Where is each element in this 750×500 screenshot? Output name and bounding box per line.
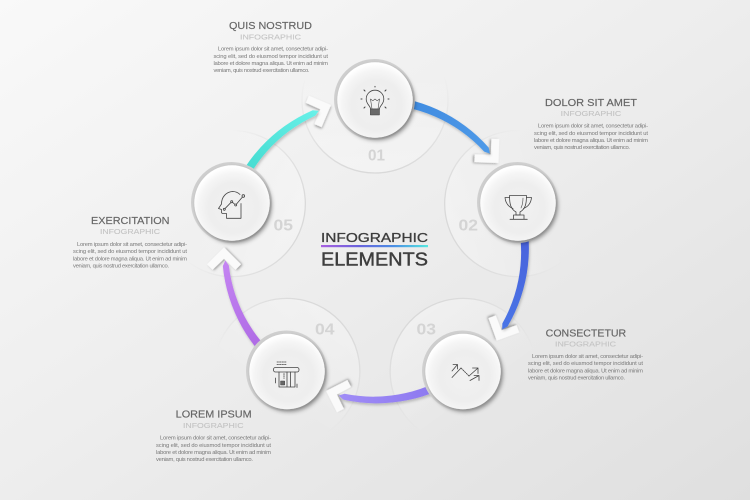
node 05: head with chart [191, 162, 272, 243]
icon: light bulb [361, 86, 389, 115]
subheading: INFOGRAPHIC [100, 227, 161, 236]
body text: Lorem ipsum dolor sit amet, consectetur adipi- [538, 124, 648, 130]
body text [73, 242, 187, 270]
decorative rings [140, 27, 610, 473]
node 02: trophy [477, 162, 558, 243]
body text: veniam, quis nostrud exercitation ullamco. [534, 145, 630, 151]
body text: scing elit, sed do eiusmod tempor incididunt ut [534, 131, 648, 137]
step numbers: 05 [274, 218, 293, 234]
subheading: INFOGRAPHIC [240, 32, 302, 42]
text panel: lorem ipsum [156, 408, 271, 463]
step numbers [274, 148, 478, 338]
heading: CONSECTETUR [546, 328, 627, 340]
body text [214, 47, 328, 74]
body text: veniam, quis nostrud exercitation ullamco. [73, 264, 169, 270]
heading: QUIS NOSTRUD [229, 20, 312, 32]
node 04: ATM [246, 330, 327, 412]
arrowheads [207, 89, 522, 414]
body text: scing elit, sed do eiusmod tempor incididunt ut [73, 249, 187, 255]
subheading: INFOGRAPHIC [555, 340, 617, 348]
text panel: dolor sit amet [534, 97, 648, 151]
icon: ATM card slot [274, 362, 299, 388]
central title [321, 230, 429, 270]
body text: Lorem ipsum dolor sit amet, consectetur adipi- [77, 242, 187, 248]
body text [156, 436, 271, 463]
body text: scing elit, sed do eiusmod tempor incididunt ut [528, 361, 643, 367]
body text: Lorem ipsum dolor sit amet, consectetur adipi- [160, 436, 271, 442]
node 01: light bulb [334, 59, 415, 140]
icon: trend arrows [452, 364, 479, 380]
title line 2: ELEMENTS [321, 250, 428, 270]
step numbers: 01 [368, 148, 385, 164]
body text [534, 124, 648, 151]
step numbers: 04 [315, 322, 335, 338]
heading: LOREM IPSUM [176, 408, 252, 420]
body text: scing elit, sed do eiusmod tempor incididunt ut [214, 54, 328, 60]
body text: veniam, quis nostrud exercitation ullamco. [214, 68, 310, 74]
icon: head with growth line [218, 192, 245, 218]
body text: veniam, quis nostrud exercitation ullamco. [156, 457, 253, 463]
icon: trophy [505, 196, 532, 219]
body text: labore et dolore magna aliqua. Ut enim ad minim [156, 450, 271, 456]
node 03: trend arrows [422, 330, 503, 412]
body text: labore et dolore magna aliqua. Ut enim ad minim [534, 138, 648, 144]
heading: DOLOR SIT AMET [545, 97, 638, 109]
body text: Lorem ipsum dolor sit amet, consectetur adipi- [218, 47, 328, 53]
title line 1: INFOGRAPHIC [321, 230, 429, 245]
text panel: quis nostrud [214, 20, 328, 74]
body text: labore et dolore magna aliqua. Ut enim ad minim [73, 256, 187, 262]
text panel: consectetur [528, 328, 643, 382]
body text: Lorem ipsum dolor sit amet, consectetur adipi- [532, 354, 643, 360]
text panel: exercitation [73, 215, 187, 270]
body text: labore et dolore magna aliqua. Ut enim ad minim [528, 368, 643, 374]
body text: labore et dolore magna aliqua. Ut enim ad minim [214, 61, 328, 67]
title gradient underline [321, 245, 428, 247]
subheading: INFOGRAPHIC [561, 109, 622, 118]
step numbers: 03 [416, 322, 436, 338]
curved connector arrows [191, 93, 557, 443]
body text: veniam, quis nostrud exercitation ullamco. [528, 376, 625, 382]
subheading: INFOGRAPHIC [183, 421, 244, 430]
heading: EXERCITATION [91, 215, 170, 227]
body text: scing elit, sed do eiusmod tempor incididunt ut [156, 443, 271, 449]
body text [528, 354, 643, 382]
step numbers: 02 [458, 218, 478, 234]
